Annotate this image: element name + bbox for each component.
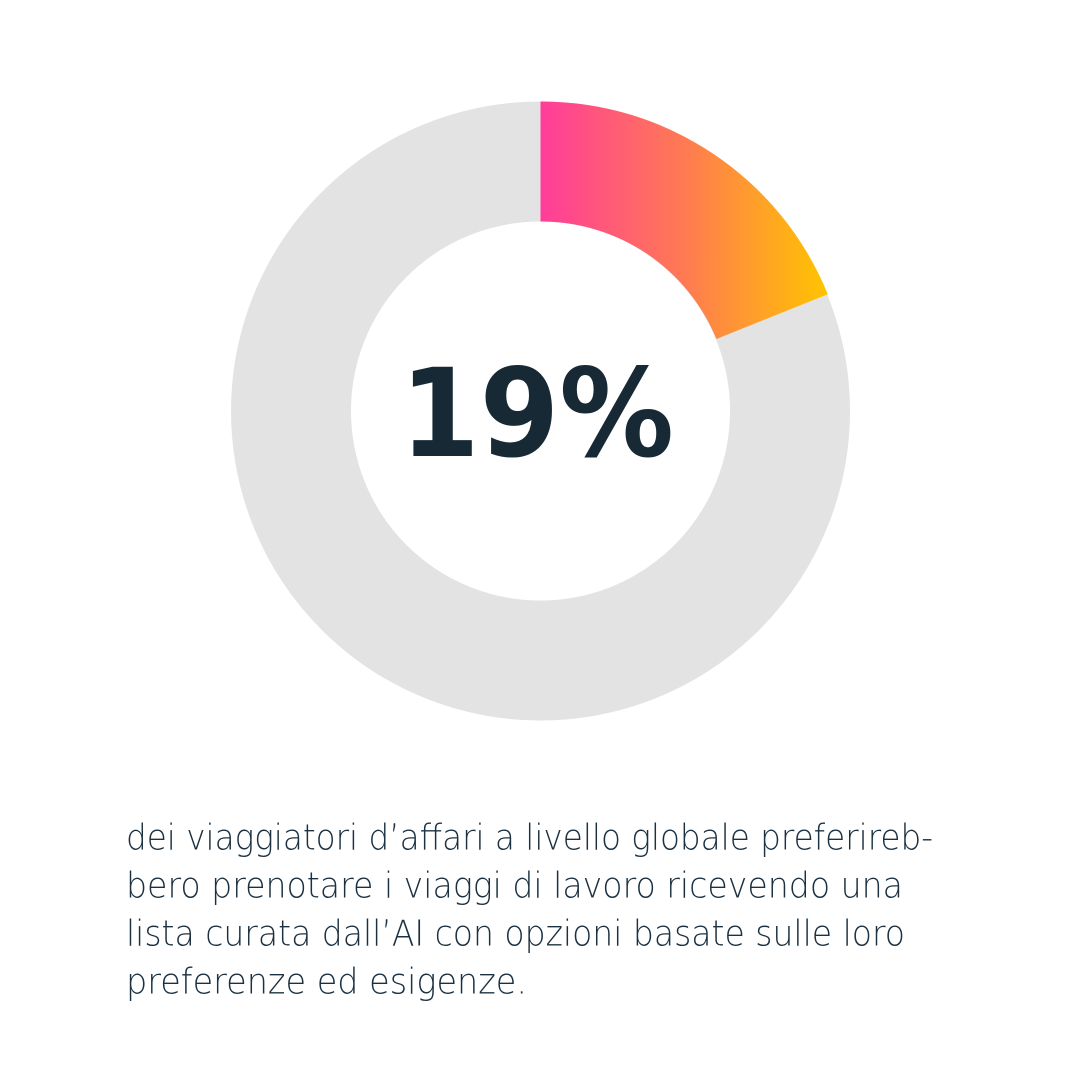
donut segment: 19% (540, 101, 828, 339)
description text: bero prenotare i viaggi di lavoro ricevendo una (126, 866, 903, 906)
description text (126, 818, 933, 1002)
description text: dei viaggiatori d’affari a livello globale preferireb- (126, 818, 933, 858)
description text: lista curata dall’AI con opzioni basate sulle loro (126, 914, 905, 954)
percentage value: 19% (400, 343, 674, 485)
donut track (291, 162, 790, 660)
donut chart (291, 101, 828, 660)
description text: preferenze ed esigenze. (126, 962, 527, 1002)
